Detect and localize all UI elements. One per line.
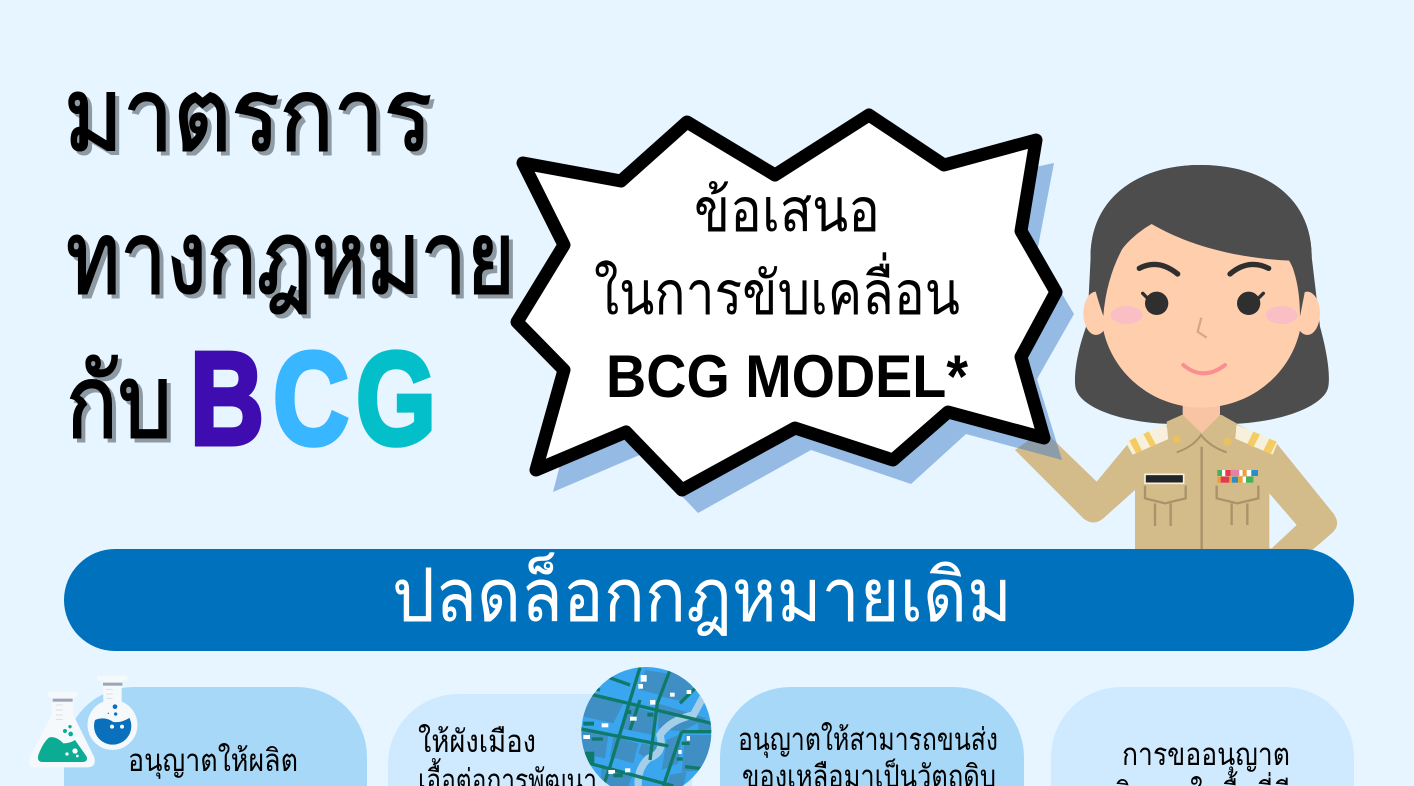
BCG letters: C (273, 325, 349, 472)
card 3 (720, 687, 1024, 786)
title text: ทางกฎหมาย (66, 201, 515, 315)
buildings (583, 675, 691, 774)
card 2 (388, 667, 713, 786)
card 3 text: อนุญาตให้สามารถขนส่ง (738, 722, 998, 759)
blush (1111, 306, 1143, 324)
pockets (1145, 486, 1258, 526)
medals (1217, 470, 1258, 483)
burst text: ข้อเสนอ (694, 177, 880, 244)
fringe (1091, 165, 1312, 317)
ears (1083, 292, 1109, 335)
burst shape (517, 115, 1056, 490)
brows (1139, 264, 1269, 274)
BCG letters: B (190, 325, 264, 472)
roads (578, 667, 713, 786)
epaulets (1125, 424, 1170, 455)
card 2 text: ให้ผังเมือง (418, 724, 536, 759)
green liquid (38, 737, 87, 762)
river (638, 697, 703, 786)
character: woman in uniform (1015, 165, 1337, 561)
title shadow: กับ (70, 349, 176, 463)
card 1 text: อนุญาตให้ผลิต (128, 743, 298, 780)
title shadow: ทางกฎหมาย (70, 205, 519, 319)
flask halo green (29, 692, 95, 767)
BCG letters: G (356, 325, 436, 472)
title (64, 58, 519, 472)
blue liquid (94, 718, 132, 745)
speech burst: ในการขับเคลื่อน (594, 252, 960, 327)
card 4 (1051, 687, 1354, 786)
title text: กับ (66, 345, 172, 459)
mouth (1183, 365, 1225, 373)
arms and body (1015, 415, 1337, 561)
card 1 (29, 676, 367, 786)
title shadow: มาตรการ (68, 62, 436, 176)
collar (1167, 415, 1237, 452)
speech burst: BCG MODEL* (606, 343, 969, 410)
neck (1183, 397, 1220, 433)
title text: มาตรการ (64, 58, 432, 172)
face (1101, 211, 1302, 408)
icon: city map (578, 667, 713, 786)
name tag (1145, 474, 1184, 483)
banner heading: ปลดล็อกกฎหมายเดิม (392, 553, 1012, 637)
eyes (1145, 292, 1168, 315)
speech burst (517, 115, 1074, 513)
button line (1198, 447, 1205, 549)
title shadow (68, 62, 519, 463)
flask halo blue (87, 676, 137, 750)
back hair (1075, 165, 1329, 424)
BCG letters (190, 325, 436, 472)
icon: lab flasks (29, 676, 137, 767)
map blocks (582, 670, 712, 786)
burst shadow (532, 133, 1074, 513)
nose (1198, 318, 1207, 338)
title text (64, 58, 515, 459)
banner (64, 549, 1354, 651)
card 4 text: การขออนุญาต (1122, 737, 1290, 774)
